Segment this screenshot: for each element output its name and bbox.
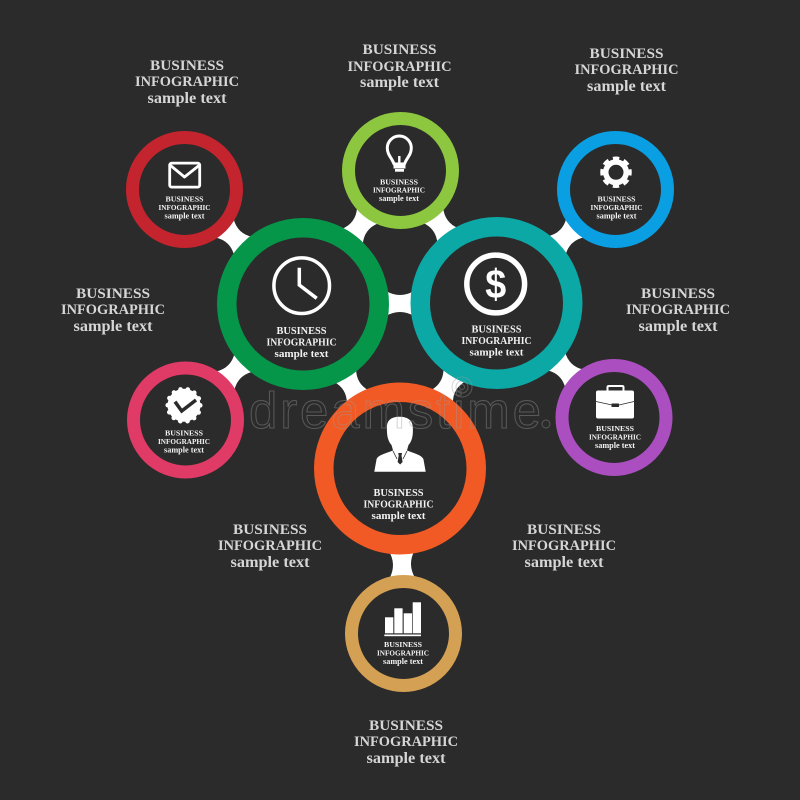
node text: BUSINESS: [596, 424, 634, 433]
node text: sample text: [596, 212, 637, 220]
panel: orange person node: [324, 392, 476, 545]
outer label: bottom: INFOGRAPHIC: [354, 734, 458, 750]
node text: sample text: [164, 446, 204, 454]
outer label: lower left: BUSINESS: [233, 522, 307, 538]
icon: gear: [602, 158, 630, 186]
white connectors between circles: [216, 207, 584, 579]
outer label: top left: [135, 58, 239, 107]
outer label: top right: BUSINESS: [590, 46, 664, 62]
outer label: middle right: [626, 286, 730, 335]
outer label: lower right: [512, 522, 616, 571]
node text: [158, 428, 210, 454]
outer label: top right: INFOGRAPHIC: [574, 62, 678, 78]
panel: red mail node: [132, 138, 236, 242]
node text: BUSINESS: [598, 194, 636, 204]
node text: sample text: [595, 441, 635, 450]
outer label: middle right: BUSINESS: [641, 286, 715, 302]
icon: bar chart: [384, 602, 421, 636]
node text: INFOGRAPHIC: [158, 437, 210, 446]
node text: BUSINESS: [472, 324, 522, 336]
panel: pink approval node: [134, 368, 238, 472]
node text: BUSINESS: [384, 640, 422, 649]
node text: [377, 640, 429, 666]
outer label: middle left: BUSINESS: [76, 286, 150, 302]
node text: [590, 194, 642, 220]
node text: [364, 488, 434, 522]
node text: sample text: [379, 194, 419, 203]
node text: [589, 424, 641, 450]
node text: sample text: [372, 510, 426, 522]
node text: sample text: [274, 348, 329, 360]
node text: BUSINESS: [374, 488, 424, 499]
node text: INFOGRAPHIC: [373, 186, 425, 195]
outer label: top left: sample text: [148, 90, 227, 107]
node text: INFOGRAPHIC: [364, 500, 434, 510]
node text: INFOGRAPHIC: [266, 338, 336, 348]
node text: sample text: [470, 346, 524, 358]
panel: teal dollar node: [420, 227, 573, 379]
node text: [158, 194, 210, 220]
outer label: top left: INFOGRAPHIC: [135, 74, 239, 90]
watermark: dreamstime: [249, 382, 541, 439]
node text: INFOGRAPHIC: [589, 432, 641, 442]
outer label: lower left: sample text: [230, 554, 310, 571]
icon: businessman: [374, 417, 426, 472]
node text: INFOGRAPHIC: [158, 203, 210, 212]
outer label: lower right: INFOGRAPHIC: [512, 538, 616, 554]
outer label: top center: BUSINESS: [362, 42, 436, 58]
node text: sample text: [383, 657, 423, 666]
node text: BUSINESS: [380, 177, 418, 186]
panel: gold chart node: [352, 582, 456, 686]
node text: BUSINESS: [276, 326, 327, 337]
icon: dollar coin: $: [485, 261, 506, 307]
outer label: lower left: [218, 522, 322, 571]
outer label: top center: sample text: [360, 74, 440, 91]
icon: briefcase: [596, 386, 634, 418]
icon: envelope: [170, 163, 200, 187]
outer label: top center: [348, 42, 452, 91]
node text: INFOGRAPHIC: [377, 648, 429, 658]
node text: BUSINESS: [166, 194, 204, 204]
icon: check badge: [168, 389, 200, 422]
icon: light bulb: [387, 136, 411, 172]
outer label: lower right: BUSINESS: [527, 522, 601, 538]
outer label: middle left: sample text: [74, 318, 153, 335]
outer label: middle left: [61, 286, 165, 335]
panel: purple briefcase node: [562, 366, 666, 470]
outer label: top left: BUSINESS: [150, 58, 224, 74]
node text: [373, 177, 425, 203]
icon: dollar coin: [467, 255, 525, 313]
outer label: middle right: INFOGRAPHIC: [626, 302, 730, 318]
outer label: bottom: sample text: [366, 750, 446, 767]
panel: lime idea node: [348, 118, 452, 222]
icon: clock: [274, 258, 330, 314]
outer label: lower right: sample text: [524, 554, 604, 571]
outer label: bottom: [354, 718, 458, 767]
node text: BUSINESS: [165, 428, 203, 438]
outer label: top center: INFOGRAPHIC: [348, 59, 452, 75]
outer label: bottom: BUSINESS: [369, 718, 443, 734]
outer label: top right: [574, 46, 678, 95]
outer label: lower left: INFOGRAPHIC: [218, 538, 322, 554]
outer label: middle left: INFOGRAPHIC: [61, 302, 165, 318]
node text: [266, 326, 336, 360]
node text: INFOGRAPHIC: [462, 336, 532, 347]
node text: sample text: [164, 212, 205, 220]
node text: [462, 324, 532, 358]
panel: blue settings node: [564, 138, 668, 242]
outer label: top right: sample text: [587, 78, 667, 95]
node text: INFOGRAPHIC: [590, 203, 642, 212]
panel: green clock node: [227, 228, 379, 380]
outer label: middle right: sample text: [638, 318, 718, 335]
